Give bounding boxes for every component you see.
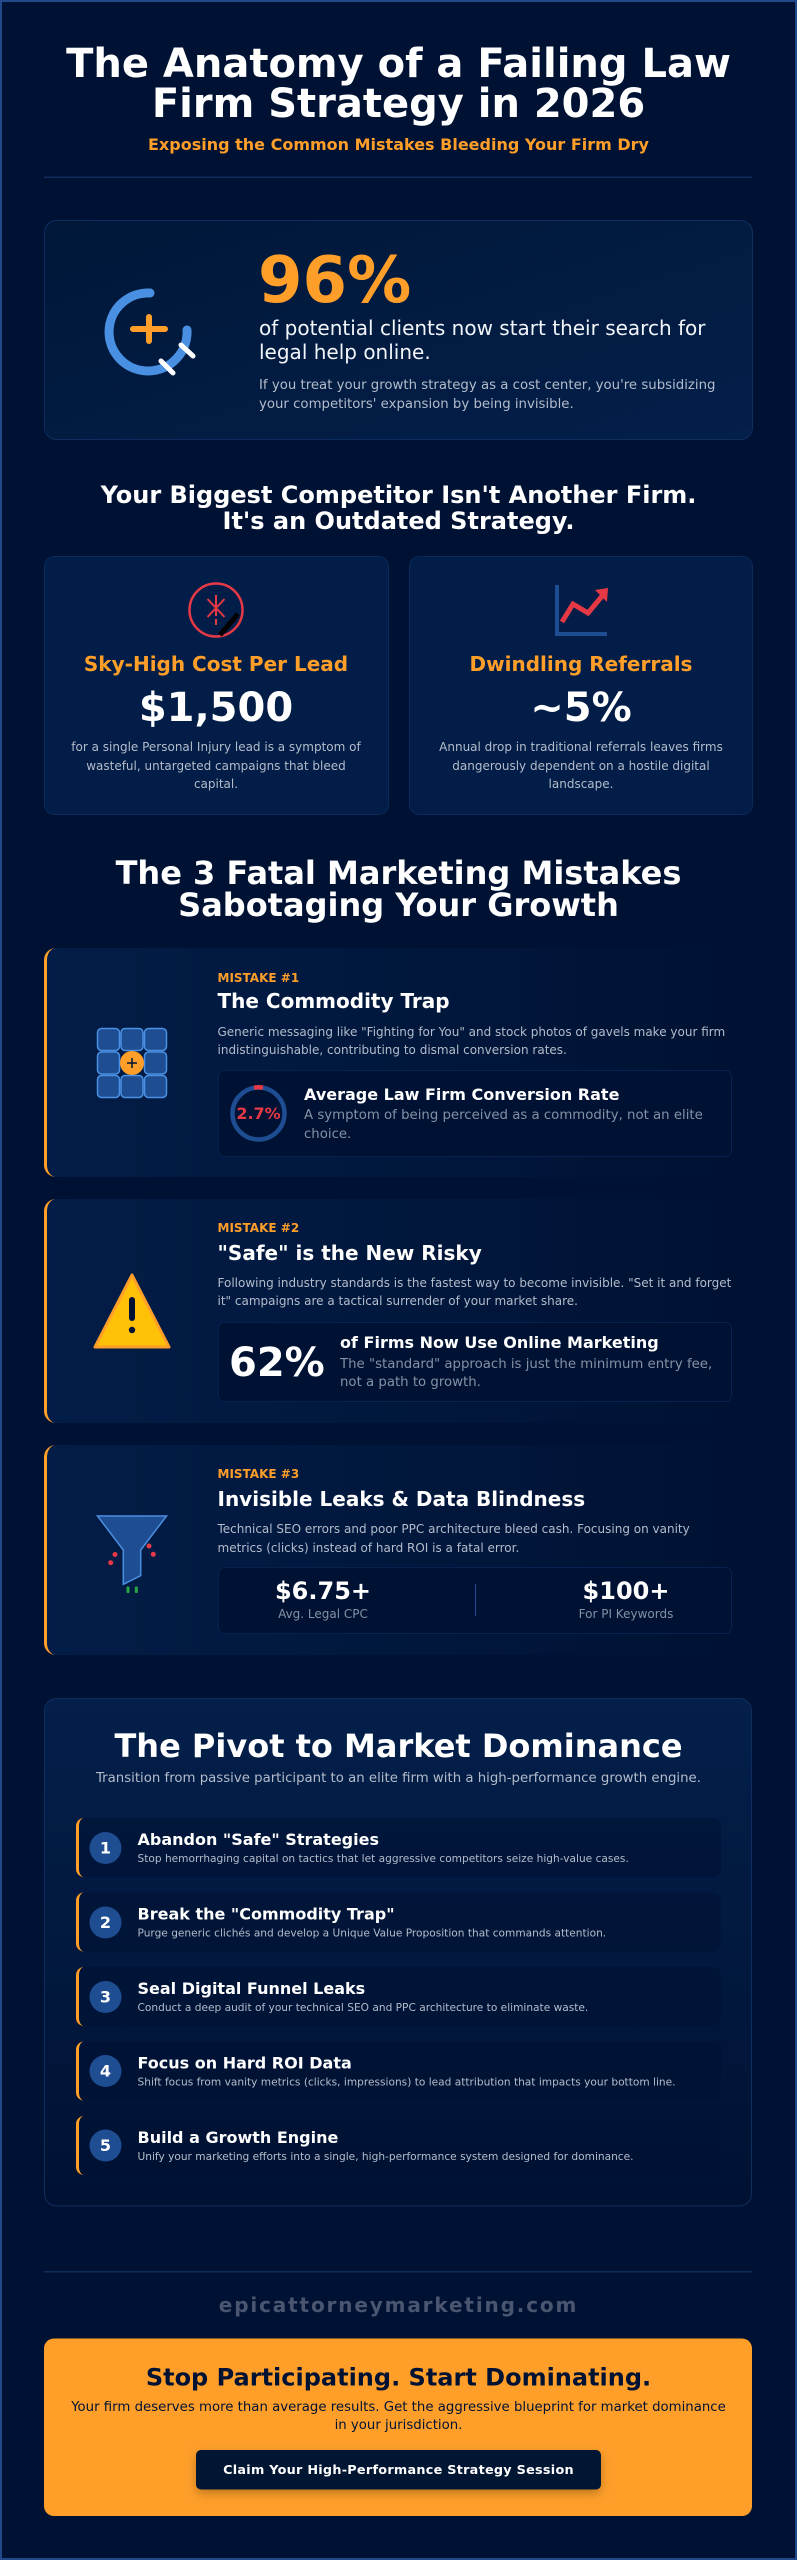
step 2 (76, 1892, 721, 1952)
step 4: Focus on Hard ROI Data (138, 2054, 352, 2072)
step 1: 1 (100, 1838, 111, 1858)
mistake description: metrics (clicks) instead of hard ROI is a fatal error. (218, 1541, 519, 1555)
stat number: 62% (229, 1340, 325, 1386)
stat box: online marketing: not a path to growth. (340, 1375, 481, 1390)
footer domain: epicattorneymarketing.com (219, 2293, 578, 2317)
mistake description: Following industry standards is the fastest way to become invisible. "Set it and forget (218, 1276, 732, 1290)
icon: warning triangle (95, 1275, 169, 1347)
step 4 (76, 2042, 721, 2100)
mistake title: Invisible Leaks & Data Blindness (218, 1487, 585, 1511)
hero statement: of potential clients now start their search for (259, 316, 706, 340)
icon: cost gauge (190, 584, 242, 636)
card number: $1,500 (139, 685, 293, 731)
stat box: online marketing (218, 1322, 732, 1402)
stat box: cost per click (218, 1568, 732, 1634)
pivot heading: The Pivot to Market Dominance (114, 1727, 683, 1765)
card description: Annual drop in traditional referrals leaves firms (439, 740, 723, 754)
step 3 (76, 1967, 721, 2026)
heading: fatal mistakes: Sabotaging Your Growth (178, 886, 619, 924)
stat: legal CPC: $6.75+ (275, 1577, 371, 1605)
card heading: Dwindling Referrals (470, 652, 692, 676)
card description: wasteful, untargeted campaigns that bleed (86, 759, 346, 773)
card description: dangerously dependent on a hostile digital (452, 759, 710, 773)
stat: PI keywords: For PI Keywords (579, 1607, 673, 1621)
step 5: Unify your marketing efforts into a single, high-performance system designed for dominance. (138, 2151, 634, 2163)
mistake description: Technical SEO errors and poor PPC architecture bleed cash. Focusing on vanity (216, 1522, 690, 1536)
heading: competitor (100, 481, 696, 535)
panel: referrals (410, 556, 752, 814)
title: Firm Strategy in 2026 (152, 81, 645, 127)
hero note: your competitors' expansion by being invisible. (259, 397, 574, 412)
mistake title: "Safe" is the New Risky (218, 1241, 482, 1265)
heading: fatal mistakes (116, 854, 681, 924)
stat: PI keywords (579, 1577, 673, 1621)
stat text: Average Law Firm Conversion Rate (304, 1085, 620, 1104)
icon: rising line chart (557, 585, 608, 634)
heading: competitor: Your Biggest Competitor Isn't Another Firm. (100, 481, 696, 509)
stat box: conversion rate (218, 1070, 732, 1156)
stat box: online marketing: The "standard" approach is just the minimum entry fee, (339, 1357, 712, 1372)
card description: landscape. (549, 777, 613, 791)
title (66, 41, 731, 127)
hero note: If you treat your growth strategy as a cost center, you're subsidizing (259, 378, 715, 393)
cta description: in your jurisdiction. (335, 2418, 462, 2433)
stat box: conversion rate: A symptom of being perceived as a commodity, not an elite (304, 1108, 703, 1123)
mistake description (218, 1025, 725, 1057)
ring chart: 2.7% (236, 1104, 281, 1123)
mistake description (216, 1522, 690, 1555)
card description: capital. (194, 777, 238, 791)
mistake description: Generic messaging like "Fighting for You" and stock photos of gavels make your firm (218, 1025, 725, 1039)
subtitle: Exposing the Common Mistakes Bleeding Your Firm Dry (148, 135, 650, 154)
title: The Anatomy of a Failing Law (66, 41, 731, 87)
hero note (259, 378, 715, 412)
hero statement (259, 316, 706, 364)
step 5 (76, 2116, 721, 2175)
step 3: Seal Digital Funnel Leaks (138, 1979, 365, 1998)
label: MISTAKE #1 (218, 971, 299, 985)
step 3: 3 (100, 1988, 111, 2006)
step 1: Abandon "Safe" Strategies (138, 1830, 379, 1849)
stat: legal CPC: Avg. Legal CPC (278, 1607, 368, 1621)
stat box: conversion rate: choice. (304, 1127, 351, 1142)
step 1 (76, 1818, 721, 1877)
label: MISTAKE #2 (218, 1221, 299, 1235)
panel: pivot to market dominance (44, 1698, 752, 2206)
hero statement: legal help online. (259, 340, 431, 364)
icon: search magnifier (109, 293, 193, 373)
card description: for a single Personal Injury lead is a symptom of (71, 740, 361, 754)
stat: legal CPC (275, 1577, 371, 1621)
step 2: Purge generic clichés and develop a Unique Value Proposition that commands attention. (138, 1928, 606, 1940)
panel: mistake 2 (44, 1199, 752, 1423)
ring chart (232, 1087, 284, 1140)
cta button (196, 2450, 601, 2490)
big number: 96% (258, 244, 411, 318)
card heading: Sky-High Cost Per Lead (84, 652, 348, 676)
pivot subheading: Transition from passive participant to an elite firm with a high-performance growth engine. (95, 1771, 701, 1786)
mistake description: indistinguishable, contributing to dismal conversion rates. (218, 1043, 567, 1057)
step 5: Build a Growth Engine (138, 2128, 338, 2147)
card description (71, 740, 361, 791)
step 4: 4 (100, 2062, 111, 2080)
step 1: Stop hemorrhaging capital on tactics that let aggressive competitors seize high-value cases. (138, 1853, 629, 1865)
card description (439, 740, 723, 791)
mistake description (218, 1276, 732, 1308)
cta description (70, 2400, 726, 2433)
mistake title: The Commodity Trap (218, 989, 450, 1013)
panel: mistake 1 (44, 948, 752, 1177)
heading: fatal mistakes: The 3 Fatal Marketing Mistakes (116, 854, 681, 892)
step 5: 5 (100, 2136, 111, 2155)
icon: leaking funnel (98, 1516, 166, 1593)
step 2: 2 (100, 1913, 111, 1932)
stat text: of Firms Now Use Online Marketing (340, 1333, 659, 1352)
mistake description: it" campaigns are a tactical surrender of your market share. (218, 1294, 578, 1308)
cta heading: Stop Participating. Start Dominating. (146, 2364, 651, 2392)
cta button: Claim Your High-Performance Strategy Session (223, 2463, 574, 2478)
step 3: Conduct a deep audit of your technical SEO and PPC architecture to eliminate waste. (138, 2002, 588, 2014)
cta description: Your firm deserves more than average results. Get the aggressive blueprint for market dominance (70, 2400, 726, 2415)
step 2: Break the "Commodity Trap" (138, 1904, 395, 1924)
panel: call to action (44, 2338, 752, 2516)
heading: competitor: It's an Outdated Strategy. (223, 507, 574, 535)
step 4: Shift focus from vanity metrics (clicks, impressions) to lead attribution that impacts your bottom line. (138, 2076, 676, 2088)
stat: PI keywords: $100+ (583, 1577, 669, 1605)
panel: hero statistic (44, 220, 752, 440)
card number: ~5% (530, 685, 632, 731)
icon: commodity grid (98, 1028, 166, 1098)
panel: cost per lead (44, 556, 388, 814)
label: MISTAKE #3 (218, 1467, 299, 1481)
panel: mistake 3 (44, 1445, 752, 1655)
